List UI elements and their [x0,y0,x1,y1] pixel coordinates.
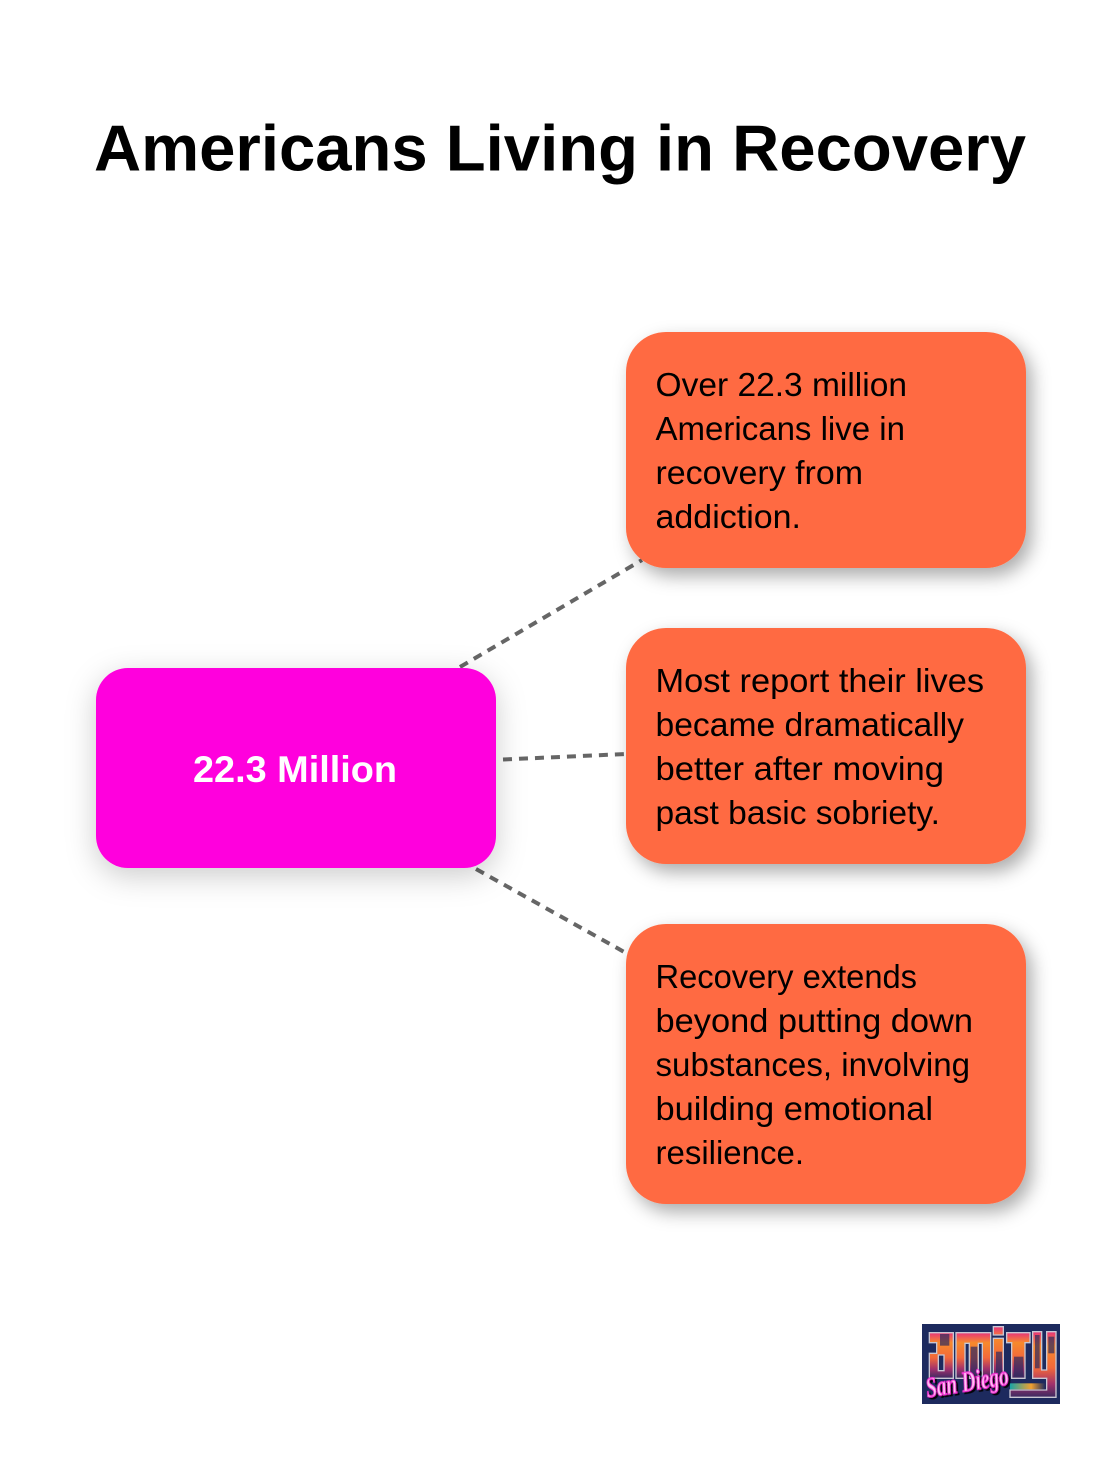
card text: middle: Most report their lives [656,662,984,699]
card: bottom, recovery extends [626,924,1026,1204]
card text: middle: became dramatically [656,706,965,743]
connector: center to bottom card [476,869,626,953]
card text: bottom: resilience. [656,1134,804,1171]
card text: bottom: Recovery extends [656,958,917,995]
logo skyline [940,1334,1054,1377]
card: middle, lives became better [626,628,1026,864]
logo: Amity San Diego [922,1324,1060,1404]
card text: bottom: beyond putting down [656,1002,973,1039]
card text: bottom [656,958,973,1171]
card text: top: recovery from [656,454,863,491]
connector: center to top card [460,560,642,667]
logo letters [929,1327,1056,1397]
card text: middle [656,662,984,831]
title: Americans Living in Recovery [94,112,1026,184]
card text: bottom: substances, involving [656,1046,970,1083]
card: top, 22.3 million Americans [626,332,1026,568]
card text: top [656,366,907,535]
card text: bottom: building emotional [656,1090,933,1127]
logo script: San Diego: San Diego [924,1361,1011,1404]
card text: top: Over 22.3 million [656,366,907,403]
card text: middle: past basic sobriety. [656,794,940,831]
card text: top: addiction. [656,498,801,535]
central card label: 22.3 Million [193,749,397,790]
card text: middle: better after moving [656,750,944,787]
central card: 22.3 Million [96,668,496,868]
connector: center to middle card [503,754,626,760]
logo beach streaks [1010,1383,1045,1389]
card text: top: Americans live in [656,410,905,447]
